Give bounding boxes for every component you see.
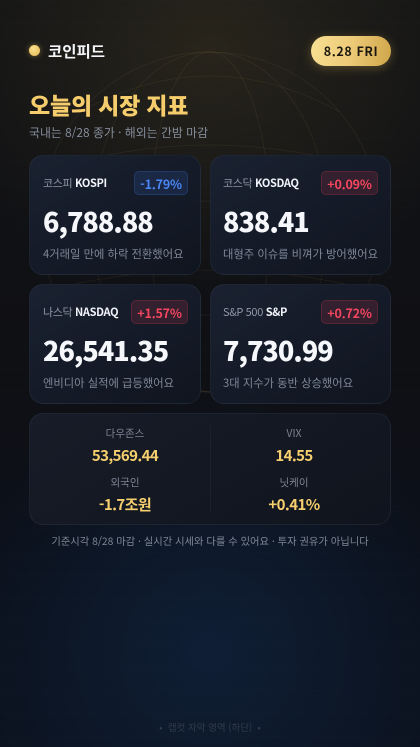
panel: secondary indicators: [29, 413, 391, 525]
label: 코스피 KOSPI: [43, 175, 107, 191]
indicator: Nikkei: 닛케이: [280, 475, 308, 490]
note: 3대 지수가 동반 상승했어요: [223, 375, 353, 391]
brand logo: [26, 40, 105, 62]
panel: S&P 500: [210, 284, 391, 404]
brand name: 코인피드: [48, 40, 105, 62]
label: 코스닥 KOSDAQ: [223, 175, 299, 191]
label: S&P 500 S&P: [223, 304, 287, 320]
change badge: +0.72%: [327, 303, 372, 322]
indicator: foreign investors: [99, 475, 151, 515]
indicator: foreign investors: -1.7조원: [99, 494, 151, 515]
panel: KOSPI: [29, 155, 201, 275]
index value: 6,788.88: [43, 201, 153, 240]
icon: gold dot: [29, 45, 40, 56]
change badge: [321, 300, 378, 324]
indicator: Nikkei: [268, 475, 320, 515]
indicator: VIX: [275, 426, 313, 466]
label: 나스닥 NASDAQ: [43, 304, 118, 320]
note: 엔비디아 실적에 급등했어요: [43, 375, 174, 391]
footnote: 기준시각 8/28 마감 · 실시간 시세와 다를 수 있어요 · 투자 권유가 아닙니다: [51, 533, 369, 548]
change badge: +0.09%: [327, 174, 372, 193]
panel: KOSDAQ: [210, 155, 391, 275]
note: 4거래일 만에 하락 전환했어요: [43, 246, 183, 262]
indicator: VIX: VIX: [286, 426, 302, 441]
change badge: [321, 171, 378, 195]
indicator: foreign investors: 외국인: [110, 475, 139, 490]
indicator: Nikkei: +0.41%: [268, 494, 320, 515]
title: 오늘의 시장 지표: [29, 87, 188, 121]
change badge: [134, 171, 188, 195]
date pill: [311, 36, 391, 66]
index value: 838.41: [223, 201, 309, 240]
index value: 7,730.99: [223, 330, 333, 369]
indicator: Dow Jones: 53,569.44: [92, 445, 158, 466]
indicator: VIX: 14.55: [275, 445, 313, 466]
globe background: [48, 52, 372, 392]
change badge: +1.57%: [137, 303, 182, 322]
date pill: 8.28 FRI: [324, 41, 378, 60]
caption safe area label: • 캡컷 자막 영역 (하단) •: [159, 720, 261, 734]
note: 대형주 이슈를 비껴가 방어했어요: [223, 246, 378, 262]
subtitle: 국내는 8/28 종가 · 해외는 간밤 마감: [29, 124, 208, 141]
indicator: Dow Jones: [92, 426, 158, 466]
change badge: [131, 300, 188, 324]
indicator: Dow Jones: 다우존스: [106, 426, 144, 441]
change badge: -1.79%: [140, 174, 182, 193]
panel: NASDAQ: [29, 284, 201, 404]
index value: 26,541.35: [43, 330, 168, 369]
